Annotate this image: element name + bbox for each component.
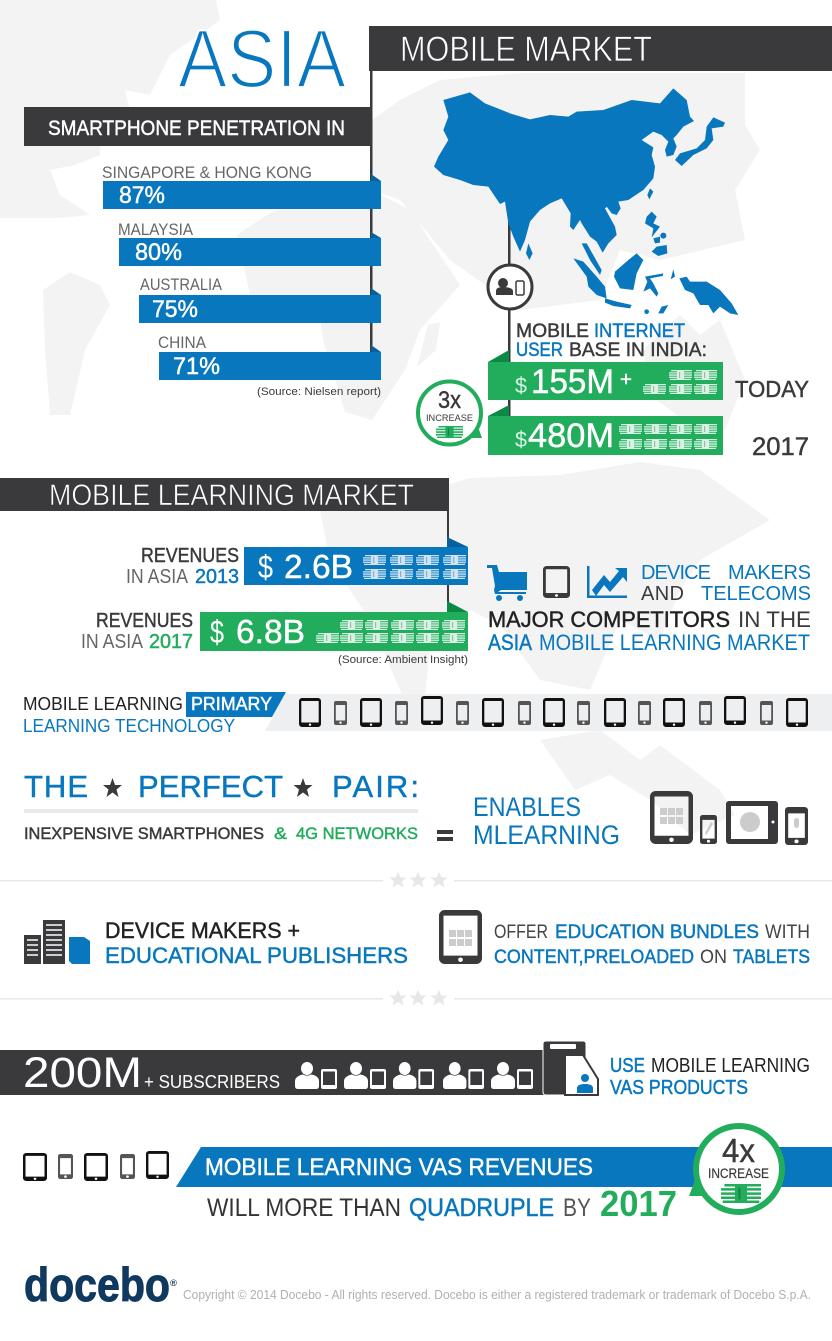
text: mobile internet user base: INTERNET [594,321,685,342]
bar: 155M today [488,350,723,401]
heading: the perfect pair: THE [24,769,88,804]
icon: user and phone circle [488,265,532,309]
icons: tablet and phones [650,791,808,845]
text: use mobile learning VAS: MOBILE LEARNING [651,1055,810,1077]
label: revenues 2017 [81,610,193,653]
map: Asia [434,88,738,315]
heading: smartphone penetration: SMARTPHONE PENETRATION IN [48,117,345,140]
text: inexpensive smartphones and 4G [24,825,418,843]
text: offer education bundles: CONTENT,PRELOADED [494,947,694,968]
title: ASIA: ASIA [178,12,347,105]
label: revenues 2017: 2017 [149,631,193,653]
text: offer education bundles: EDUCATION BUNDLES [555,922,759,943]
label: revenues 2013 [126,545,239,588]
text: offer education bundles: OFFER [494,922,548,943]
badge: 4x increase [689,1126,782,1212]
text: will more than quadruple: QUADRUPLE [409,1194,554,1222]
bar: Malaysia 80% [118,220,381,266]
bar: Australia 75%: 75% [152,296,198,323]
band: 200M subscribers: 200M [23,1049,142,1097]
text: major competitors [488,607,811,655]
bar: revenues 2013 [244,537,468,585]
icons: device row [299,696,808,727]
text: device makers and telecoms [641,562,811,605]
text: use mobile learning VAS [610,1055,810,1099]
text: mobile internet user base: BASE IN INDIA: [569,340,707,361]
heading: mobile market: MOBILE MARKET [400,30,652,69]
badge: 4x increase: INCREASE [708,1165,769,1181]
source: Nielsen: (Source: Nielsen report) [257,386,381,398]
text: will more than quadruple [207,1183,677,1224]
text: mobile learning: MOBILE LEARNING [23,694,183,714]
bar: Australia 75%: AUSTRALIA [140,275,223,294]
icon: shopping cart [487,565,527,601]
copyright: Copyright © 2014 Docebo - All rights reserved. Docebo is either a registered trademark or trademark of Docebo S.p.A. [183,1288,811,1302]
text: major competitors: MOBILE LEARNING MARKET [539,630,810,655]
band: 200M subscribers [0,1049,562,1097]
connector line: top [370,70,372,365]
text: mobile internet user base: USER [516,340,563,361]
text: offer education bundles: ON [700,947,727,968]
text: use mobile learning VAS: USE [610,1055,645,1077]
heading: mobile market [369,26,832,71]
logo: docebo: ® [170,1278,177,1288]
logo: docebo: docebo [24,1258,170,1311]
connector line: India [508,220,510,416]
text: inexpensive smartphones and 4G: INEXPENSIVE SMARTPHONES [24,825,264,843]
text: device makers and telecoms: MAKERS [728,562,811,584]
text: enables mlearning [473,792,620,850]
text: major competitors: ASIA [488,630,532,655]
badge: 3x increase [418,382,482,444]
bar: revenues 2017: 6.8B [236,613,305,650]
badge: 4x increase: 4x [722,1132,755,1169]
heading: mobile learning market: MOBILE LEARNING MARKET [49,479,414,512]
bar: 480M 2017: $ [515,427,527,452]
text: major competitors: MAJOR COMPETITORS [488,607,730,632]
bar: revenues 2013: $ [258,549,273,585]
heading: smartphone penetration [24,107,371,146]
label: revenues 2013: IN ASIA [126,566,189,588]
text: enables mlearning: MLEARNING [473,820,620,850]
label: revenues 2013: 2013 [195,566,239,588]
text: device makers and telecoms: DEVICE [641,562,711,584]
text: learning technology: LEARNING TECHNOLOGY [23,716,235,736]
text: will more than quadruple: WILL MORE THAN [207,1194,401,1222]
divider with stars [0,872,832,888]
text: mobile internet user base [516,321,707,361]
label: revenues 2017: IN ASIA [81,631,144,653]
bar: 155M today: $ [515,373,527,398]
icon: growth chart [587,566,627,598]
badge: 3x increase: 3x [438,387,461,414]
bar: revenues 2017 [200,601,468,651]
banner: VAS revenues: MOBILE LEARNING VAS REVENUES [205,1154,593,1181]
text: major competitors: IN THE [738,607,811,632]
bar: 155M today: 155M [531,363,614,401]
text: inexpensive smartphones and 4G: & [274,825,287,843]
heading: the perfect pair: PERFECT [138,769,283,804]
bar: Malaysia 80%: MALAYSIA [118,220,194,239]
text: device makers and telecoms: AND [641,583,684,605]
source: Ambient Insight: (Source: Ambient Insight) [338,654,468,666]
background: world maps [0,0,770,835]
text: device makers and publishers: DEVICE MAKERS + [105,918,300,943]
text: will more than quadruple: 2017 [600,1183,677,1224]
heading: the perfect pair [24,769,419,804]
bar: revenues 2017: $ [210,614,224,650]
tag: primary: PRIMARY [191,694,272,714]
text: device makers and telecoms: TELECOMS [701,583,811,605]
connector line: revenues [447,511,449,616]
label: 2017: 2017 [752,433,809,461]
text: enables mlearning: ENABLES [473,792,581,822]
text: inexpensive smartphones and 4G: 4G NETWORKS [296,825,418,843]
text: offer education bundles: TABLETS [733,947,810,968]
bar: China 71% [158,333,381,380]
bar: Singapore and Hong Kong 87% [102,163,381,209]
label: revenues 2017: REVENUES [96,610,193,632]
label: revenues 2013: REVENUES [141,545,239,567]
bar: 480M 2017 [488,405,723,455]
text: device makers and publishers: EDUCATIONAL PUBLISHERS [105,943,408,968]
bar: Singapore and Hong Kong 87%: 87% [119,182,165,209]
divider with stars [0,990,832,1006]
bar: 155M today: + [620,369,632,391]
icon: equals [437,830,453,841]
bar: revenues 2013: 2.6B [284,548,353,585]
icons: device row bottom [23,1151,169,1181]
icon: buildings and book [24,920,90,964]
tag: primary [186,692,286,717]
bar: China 71%: 71% [173,353,220,380]
band: 200M subscribers: + SUBSCRIBERS [144,1071,280,1092]
text: will more than quadruple: BY [563,1194,591,1222]
heading: the perfect pair: PAIR: [332,769,419,804]
text: device makers and publishers [105,918,408,968]
icon: tablet [439,910,482,964]
text: use mobile learning VAS: VAS PRODUCTS [610,1077,748,1099]
band: primary learning technology [265,694,832,731]
icon: tablet with document [543,1041,598,1095]
bar: China 71%: CHINA [158,333,207,352]
text: offer education bundles: WITH [765,922,810,943]
bar: Singapore and Hong Kong 87%: SINGAPORE & HONG KONG [102,163,312,182]
banner: VAS revenues [176,1147,832,1187]
badge: 3x increase: INCREASE [426,413,473,424]
bar: Australia 75% [139,275,381,323]
text: mobile internet user base: MOBILE [516,321,589,342]
bar: 480M 2017: 480M [528,417,614,455]
bar: Malaysia 80%: 80% [135,239,182,266]
icon: phone [543,566,570,598]
label: today: TODAY [735,376,809,402]
text: offer education bundles [494,922,810,968]
